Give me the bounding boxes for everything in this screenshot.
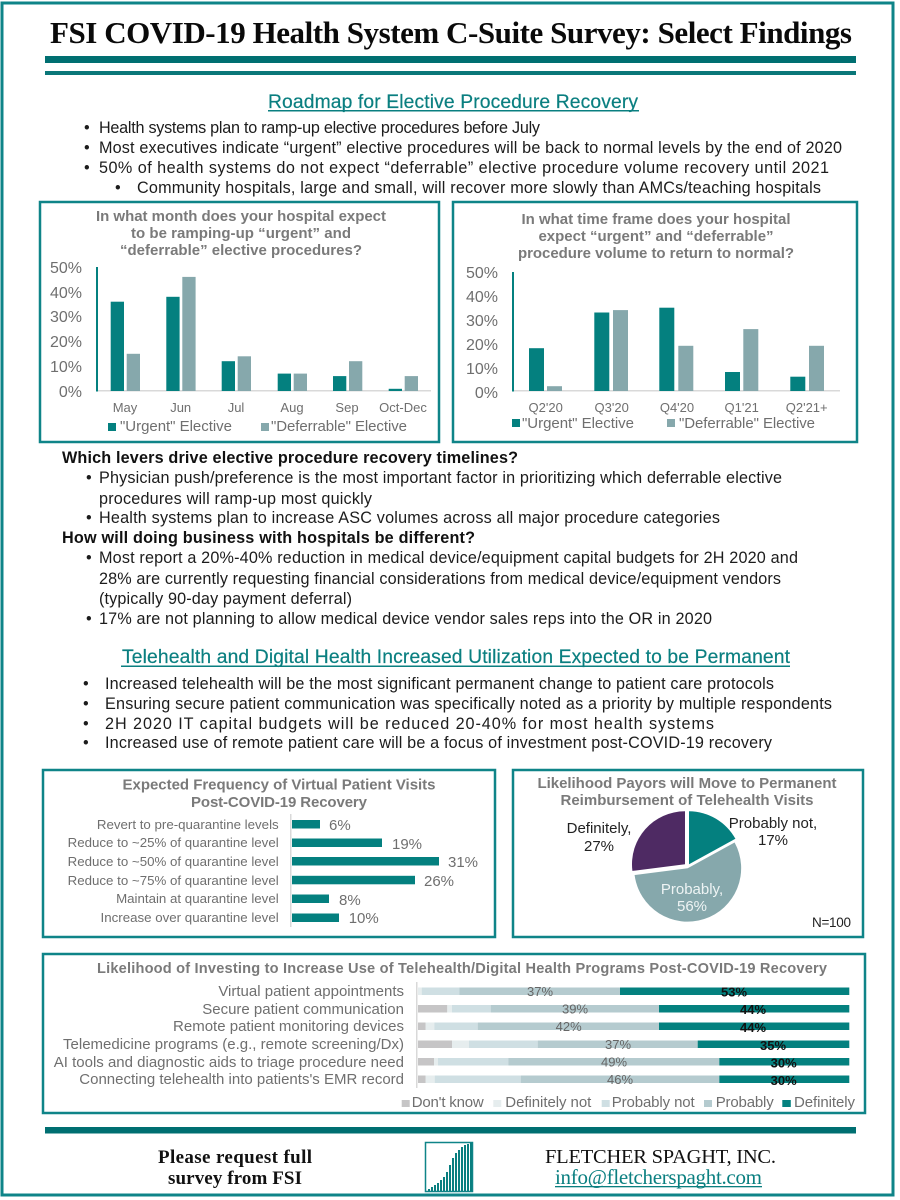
text block: levers and doing business: • [86, 509, 92, 527]
value labels: 26% [424, 873, 454, 890]
category labels: Connecting telehealth into patients's EMR record [79, 1071, 404, 1088]
text block: telehealth bullets: Ensuring secure patient communication was specifically noted as a priority by multiple respondents [105, 695, 832, 713]
sample size note: N=100 [812, 915, 851, 930]
category labels: Reduce to ~25% of quarantine level [68, 835, 279, 850]
text block: telehealth bullets: 2H 2020 IT capital budgets will be reduced 20-40% for most health systems [105, 715, 714, 733]
chart title: expect “urgent” and “deferrable” [538, 228, 774, 245]
text block: roadmap bullets: Health systems plan to ramp-up elective procedures before July [99, 119, 541, 137]
text block: levers and doing business: Which levers drive elective procedure recovery timelines? [62, 449, 518, 467]
text block: telehealth bullets: • [83, 715, 89, 733]
text block: roadmap bullets: Most executives indicate “urgent” elective procedures will be back to normal levels by the end of 2020 [99, 139, 842, 157]
value labels: 46% [607, 1072, 633, 1087]
y axis labels: 40% [50, 285, 82, 302]
text block: levers and doing business [62, 449, 798, 628]
legend [402, 1094, 856, 1111]
chart title [518, 211, 794, 262]
value labels: 44% [740, 1002, 766, 1017]
chart title [122, 776, 436, 811]
chart title: In what month does your hospital expect [96, 208, 386, 225]
y axis labels: 30% [50, 309, 82, 326]
pie label: probably not [729, 815, 817, 849]
text block: levers and doing business: (typically 90-day payment deferral) [99, 590, 352, 608]
text block: levers and doing business: • [86, 549, 92, 567]
category labels: Secure patient communication [202, 1001, 404, 1018]
value labels: 19% [392, 836, 422, 853]
legend: Don't know [412, 1094, 484, 1111]
pie label: definitely: 27% [584, 838, 614, 855]
title: FSI COVID-19 Health System C-Suite Survey: Select Findings [50, 15, 852, 50]
value labels: 42% [556, 1019, 582, 1034]
y axis labels: 10% [50, 359, 82, 376]
text block: roadmap bullets: Community hospitals, large and small, will recover more slowly than AMCs/teaching hospitals [137, 179, 821, 197]
x axis labels: May [113, 400, 138, 415]
text block: levers and doing business: • [86, 469, 92, 487]
heading: telehealth and digital health: Telehealth and Digital Health Increased Utilization Expected to be Permanent [122, 647, 791, 668]
value labels: 35% [760, 1038, 786, 1053]
legend: "Urgent" Elective [120, 418, 232, 435]
x axis labels: Oct-Dec [379, 400, 427, 415]
pie label: probably: 56% [677, 898, 707, 915]
x axis labels: Jul [228, 400, 244, 415]
value labels: 53% [721, 984, 747, 1000]
text block: levers and doing business: Health systems plan to increase ASC volumes across all major procedure categories [99, 509, 720, 527]
chart title [538, 775, 836, 809]
category labels: Increase over quarantine level [101, 910, 279, 925]
value labels: 30% [771, 1073, 797, 1088]
text block: levers and doing business: Physician push/preference is the most important factor in prioritizing which deferrable elective [99, 469, 782, 487]
panel: expected frequency of virtual visits [43, 770, 495, 937]
text block: roadmap bullets [84, 119, 842, 197]
pie label: probably [661, 881, 723, 915]
x axis labels [113, 400, 427, 415]
chart title [96, 208, 386, 259]
category labels [68, 817, 279, 925]
x axis labels: Jun [170, 400, 191, 415]
text block: roadmap bullets: • [84, 159, 90, 177]
y axis labels: 50% [50, 260, 82, 277]
category labels [54, 983, 404, 1088]
horizontal bar chart [290, 814, 439, 927]
text block: levers and doing business: procedures will ramp-up most quickly [99, 490, 373, 508]
value labels: 44% [740, 1020, 766, 1035]
text block: telehealth bullets: Increased telehealth will be the most significant permanent change to patient care protocols [105, 675, 774, 693]
text block: company contact: FLETCHER SPAGHT, INC. [545, 1146, 776, 1168]
text block: request survey: Please request full [158, 1147, 312, 1168]
panel: likelihood payors reimbursement [513, 770, 863, 937]
text block: levers and doing business: 28% are currently requesting financial considerations from medical device/equipment vendors [99, 570, 781, 588]
text block: telehealth bullets: • [83, 734, 89, 752]
legend: Definitely [794, 1094, 856, 1111]
x axis labels: Q2'20 [529, 400, 563, 415]
value labels [329, 817, 478, 927]
chart title: Likelihood Payors will Move to Permanent [538, 775, 836, 792]
panel: likelihood of investing [43, 954, 865, 1113]
chart title: “deferrable” elective procedures? [120, 242, 362, 259]
x axis labels [529, 400, 828, 415]
y axis labels [466, 265, 498, 402]
text block: roadmap bullets: 50% of health systems do not expect “deferrable” elective procedure volume recovery until 2021 [99, 159, 829, 177]
bar chart: urgent and deferrable by month [96, 267, 431, 392]
heading: roadmap for elective procedure recovery: Roadmap for Elective Procedure Recovery [268, 92, 638, 113]
text block: roadmap bullets: • [84, 139, 90, 157]
category labels: Reduce to ~75% of quarantine level [68, 873, 279, 888]
text block: levers and doing business: Most report a 20%-40% reduction in medical device/equipment capital budgets for 2H 2020 and [99, 549, 798, 567]
text block: telehealth bullets: • [83, 675, 89, 693]
chart title: Expected Frequency of Virtual Patient Visits [122, 776, 436, 794]
category labels: Revert to pre-quarantine levels [97, 817, 279, 832]
x axis labels: Q3'20 [595, 400, 629, 415]
x axis labels: Aug [280, 400, 304, 415]
panel: time frame to normal chart [453, 202, 857, 442]
text block: request survey [158, 1147, 312, 1189]
text block: company contact: info@fletcherspaght.com [555, 1165, 762, 1189]
text block: telehealth bullets [83, 675, 832, 752]
text block: levers and doing business: How will doing business with hospitals be different? [62, 529, 475, 547]
category labels: Maintain at quarantine level [116, 891, 279, 906]
legend: "Urgent" Elective [522, 415, 634, 432]
value labels: 10% [349, 910, 379, 927]
pie label: probably not: 17% [758, 832, 788, 849]
icon: fletcher spaght logo [426, 1142, 472, 1192]
y axis labels: 0% [475, 385, 498, 402]
x axis labels: Sep [335, 400, 359, 415]
pie chart [632, 811, 741, 922]
value labels: 8% [339, 892, 361, 909]
chart title: Reimbursement of Telehealth Visits [560, 792, 814, 809]
legend: Probably not [612, 1094, 696, 1111]
bar chart: urgent and deferrable by quarter [512, 272, 840, 392]
y axis labels [50, 260, 82, 401]
value labels: 30% [771, 1056, 797, 1070]
category labels: Reduce to ~50% of quarantine level [68, 854, 279, 869]
legend: "Deferrable" Elective [679, 415, 815, 432]
y axis labels: 0% [59, 384, 82, 401]
value labels: 6% [329, 817, 351, 834]
text block: telehealth bullets: • [83, 695, 89, 713]
x axis labels: Q2'21+ [786, 400, 828, 415]
category labels: Telemedicine programs (e.g., remote screening/Dx) [63, 1036, 404, 1053]
category labels: Virtual patient appointments [218, 983, 404, 1000]
pie label: probably not: Probably not, [729, 815, 817, 832]
legend [512, 415, 815, 432]
y axis labels: 40% [466, 289, 498, 306]
x axis labels: Q4'20 [660, 400, 694, 415]
value labels: 31% [448, 854, 478, 871]
chart title: Post-COVID-19 Recovery [191, 794, 368, 811]
legend [108, 418, 407, 435]
legend: "Deferrable" Elective [271, 418, 407, 435]
chart title: In what time frame does your hospital [522, 211, 790, 228]
value labels: 37% [605, 1037, 631, 1052]
chart title: to be ramping-up “urgent” and [131, 225, 351, 242]
text block: roadmap bullets: • [84, 119, 90, 137]
chart title: procedure volume to return to normal? [518, 245, 794, 262]
text block: levers and doing business: 17% are not planning to allow medical device vendor sales reps into the OR in 2020 [99, 610, 712, 628]
text block: company contact [545, 1146, 776, 1189]
y axis labels: 20% [466, 337, 498, 354]
pie label: definitely [567, 820, 631, 855]
y axis labels: 20% [50, 334, 82, 351]
value labels: 49% [601, 1054, 627, 1070]
value labels: 37% [527, 984, 553, 999]
chart title: Likelihood of Investing to Increase Use of Telehealth/Digital Health Programs Post-COVID-19 Recovery [97, 961, 828, 977]
y axis labels: 30% [466, 313, 498, 330]
y axis labels: 10% [466, 361, 498, 378]
pie label: definitely: Definitely, [567, 820, 631, 837]
value labels [527, 984, 797, 1088]
stacked bar chart [416, 982, 849, 1088]
legend: Probably [716, 1094, 774, 1111]
value labels: 39% [562, 1002, 588, 1016]
text block: roadmap bullets: • [115, 179, 121, 197]
category labels: AI tools and diagnostic aids to triage procedure need [54, 1054, 404, 1071]
legend: Definitely not [505, 1094, 592, 1111]
category labels: Remote patient monitoring devices [173, 1018, 404, 1035]
text block: telehealth bullets: Increased use of remote patient care will be a focus of investment post-COVID-19 recovery [105, 734, 773, 752]
text block: request survey: survey from FSI [168, 1168, 302, 1189]
pie label: probably: Probably, [661, 881, 723, 898]
text block: levers and doing business: • [86, 610, 92, 628]
panel: month of ramp-up chart [40, 202, 439, 442]
y axis labels: 50% [466, 265, 498, 282]
x axis labels: Q1'21 [725, 400, 759, 415]
